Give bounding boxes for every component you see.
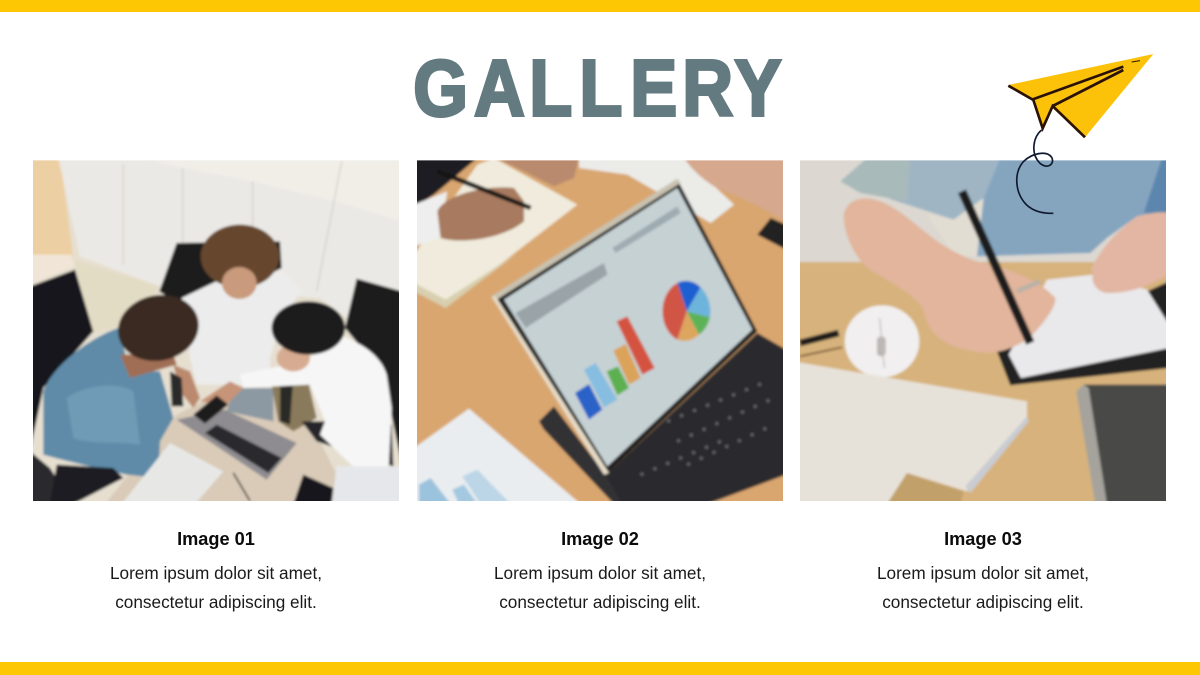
icon: yellow paper plane with looping trail [1008,54,1154,214]
caption: image 01: consectetur adipiscing elit. [115,592,317,612]
caption: image 01: Image 01 [177,529,255,549]
caption: image 03: consectetur adipiscing elit. [882,592,1084,612]
caption: image 02: Image 02 [561,529,639,549]
caption: image 03 [877,529,1089,612]
caption: image 03: Image 03 [944,529,1022,549]
caption: image 02 [494,529,706,612]
bottom yellow bar [0,662,1200,675]
caption: image 01 [110,529,322,612]
caption: image 02: consectetur adipiscing elit. [499,592,701,612]
caption: image 01: Lorem ipsum dolor sit amet, [110,563,322,583]
title: GALLERY [413,43,781,132]
photo 3: hand writing in a notebook beside a mouse [800,160,1166,501]
caption: image 02: Lorem ipsum dolor sit amet, [494,563,706,583]
photo 1: three colleagues around a laptop [33,160,399,501]
caption: image 03: Lorem ipsum dolor sit amet, [877,563,1089,583]
top yellow bar [0,0,1200,12]
photo 2: tablet showing charts on a wooden desk [417,160,783,501]
